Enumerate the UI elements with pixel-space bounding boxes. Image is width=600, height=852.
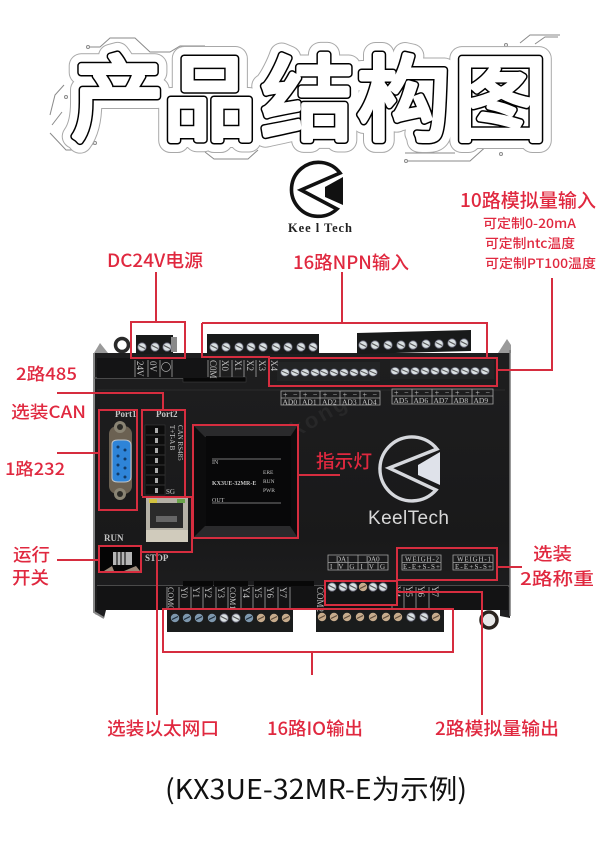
labels: AD0-AD4 grid: AD2 <box>322 397 337 406</box>
title white fill: 图 <box>454 25 547 160</box>
label: 选装2路称重: 选装 <box>533 541 572 566</box>
chamfer corners and mounting tabs <box>94 339 511 353</box>
terminal: analog input right <box>390 360 494 379</box>
indicator panel: IN <box>212 460 219 466</box>
title black outline <box>71 25 547 160</box>
labels: Y outputs: COM1 <box>228 587 237 609</box>
labels: AD5-AD9 grid: AD6 <box>414 396 428 405</box>
labels: AD0-AD4 grid: AD3 <box>342 397 357 406</box>
title black outline: 图 <box>454 25 547 160</box>
run switch: STOP <box>145 553 169 563</box>
title black outline: 结 <box>261 25 354 160</box>
caption: (KX3UE-32MR-E为示例) <box>165 768 467 807</box>
labels: Y outputs: Y4 <box>241 587 251 598</box>
labels: AD5-AD9 grid: + − + − + − + − + − <box>394 388 490 398</box>
port2: RS485 terminal: CAN RS485 <box>176 425 184 461</box>
run switch <box>100 533 169 571</box>
title: 产品结构图 <box>50 25 560 162</box>
title outer halo <box>71 25 547 160</box>
labels: Y outputs: Y4 <box>392 586 402 597</box>
labels: WEIGH-2 grid <box>402 555 441 571</box>
labels: Y outputs: Y7 <box>430 586 440 597</box>
terminal: analog output: COM2 <box>315 587 325 612</box>
port: RJ45 Ethernet <box>146 498 188 542</box>
label: 16路IO输出: 16路IO输出 <box>267 715 363 741</box>
title outer halo: 图 <box>454 25 547 160</box>
title outer halo: 产 <box>71 25 164 160</box>
labels: DA grid <box>328 555 388 571</box>
title white fill: 构 <box>357 25 450 160</box>
terminal: DC power <box>136 335 177 354</box>
title halo inner: 构 <box>357 25 450 160</box>
label: 2路485: 2路485 <box>16 360 77 385</box>
title black outline: 品 <box>163 25 256 160</box>
label: 10路模拟量输入 block: 可定制0-20mA <box>483 213 577 232</box>
labels: Y outputs: Y5 <box>253 587 263 598</box>
indicator panel: ERE <box>263 470 274 476</box>
label: 选装CAN: 选装CAN <box>11 398 86 423</box>
labels: power and X inputs <box>135 360 279 379</box>
labels: power and X inputs: C0M <box>208 360 218 379</box>
device logo: KeelTech <box>368 437 449 529</box>
title black outline: 构 <box>357 25 450 160</box>
title halo inner: 品 <box>163 25 256 160</box>
label: 16路NPN输入: 16路NPN输入 <box>293 249 409 275</box>
device: PLC body <box>94 338 511 628</box>
label: DC24V电源: DC24V电源 <box>107 247 203 273</box>
label: 指示灯: 指示灯 <box>316 448 372 474</box>
labels: Y outputs: Y0 <box>179 587 189 598</box>
device logo: KeelTech: KeelTech <box>368 508 449 529</box>
title outer halo: 构 <box>357 25 450 160</box>
labels: WEIGH-2 grid: E-E+S-S+ <box>403 563 440 571</box>
title white fill: 品 <box>163 25 256 160</box>
label: 选装以太网口: 选装以太网口 <box>107 715 219 741</box>
indicator panel: PWR <box>263 488 275 494</box>
title white fill <box>71 25 547 160</box>
title halo inner <box>71 25 547 160</box>
labels: AD0-AD4 grid: AD4 <box>362 397 377 406</box>
label: 10路模拟量输入 block <box>460 186 596 272</box>
labels: Y outputs: Y6 <box>265 587 275 598</box>
labels: Y outputs <box>166 586 440 609</box>
labels: Y outputs: Y3 <box>216 587 226 598</box>
labels: power and X inputs: 24V <box>135 361 145 377</box>
labels: WEIGH-1 grid: WEIGH-1 <box>457 556 492 564</box>
label: 运行开关: 运行 <box>13 542 50 567</box>
indicator panel: KX3UE-32MR-E <box>212 481 256 487</box>
labels: AD5-AD9 grid: AD8 <box>454 396 468 405</box>
labels: Y outputs: Y5 <box>404 586 414 597</box>
label: 选装2路称重 <box>520 541 594 591</box>
terminal: analog input left <box>277 362 380 381</box>
label: 运行开关: 开关 <box>12 565 49 590</box>
labels: power and X inputs: X3 <box>257 360 267 371</box>
labels: AD0-AD4 grid: + − + − + − + − + − <box>283 390 377 400</box>
label: 运行开关 <box>12 542 50 590</box>
port2: RS485 terminal <box>145 409 184 496</box>
labels: AD5-AD9 grid: AD9 <box>474 396 488 405</box>
terminal: bottom output right <box>316 610 444 632</box>
terminal: bottom output left <box>167 610 293 632</box>
label: 10路模拟量输入 block: 可定制PT100温度 <box>485 253 596 272</box>
brand logo: Keel Tech <box>288 162 352 235</box>
labels: DA grid: DA1 <box>336 556 350 564</box>
title halo inner: 产 <box>71 25 164 160</box>
terminal: top row left <box>207 334 319 354</box>
labels: WEIGH-2 grid: WEIGH-2 <box>405 556 440 564</box>
label: 10路模拟量输入 block: 可定制ntc温度 <box>485 233 575 252</box>
indicator panel <box>193 425 298 538</box>
labels: Y outputs: Y1 <box>191 587 201 598</box>
label: 1路232: 1路232 <box>5 455 65 480</box>
indicator panel: RUN <box>263 479 275 485</box>
labels: WEIGH-1 grid: E-E+S-S+ <box>455 563 492 571</box>
labels: power and X inputs: X0 <box>220 360 230 371</box>
labels: AD0-AD4 grid: AD1 <box>302 397 317 406</box>
circuit traces around title <box>50 35 560 162</box>
title halo inner: 图 <box>454 25 547 160</box>
title halo inner: 结 <box>261 25 354 160</box>
labels: power and X inputs: X4 <box>269 360 279 371</box>
mounting tab bottom right <box>481 612 497 628</box>
run switch: RUN <box>104 533 124 543</box>
watermark: gongkong <box>230 390 351 474</box>
title white fill: 结 <box>261 25 354 160</box>
red annotation lines and boxes <box>57 272 552 715</box>
terminal: analog output <box>315 581 396 612</box>
terminal: top row right <box>357 330 471 354</box>
labels: WEIGH-1 grid <box>453 555 493 571</box>
labels: power and X inputs: 0V <box>148 361 158 372</box>
brand logo: Keel Tech: Kee l Tech <box>288 221 352 235</box>
labels: AD5-AD9 grid <box>392 388 493 405</box>
title outer halo: 品 <box>163 25 256 160</box>
labels: power and X inputs: X1 <box>233 360 243 371</box>
labels: AD0-AD4 grid <box>281 390 380 406</box>
title black outline: 产 <box>71 25 164 160</box>
labels: Y outputs: COM0 <box>166 587 175 609</box>
indicator panel: OUT <box>212 498 225 504</box>
labels: AD0-AD4 grid: AD0 <box>282 397 297 406</box>
label: 2路模拟量输出: 2路模拟量输出 <box>435 715 559 741</box>
port1: DB9 serial connector: Port1 <box>115 409 137 419</box>
title outer halo: 结 <box>261 25 354 160</box>
label: 10路模拟量输入 block: 10路模拟量输入 <box>460 186 596 213</box>
labels: AD5-AD9 grid: AD5 <box>394 396 408 405</box>
label: 选装2路称重: 2路称重 <box>520 566 594 591</box>
title white fill: 产 <box>71 25 164 160</box>
labels: DA grid: DA0 <box>366 556 380 564</box>
port2: RS485 terminal: SG <box>166 488 175 496</box>
labels: DA grid: I V G I V G <box>330 563 385 571</box>
port2: RS485 terminal: T+T-A B <box>168 425 176 451</box>
labels: Y outputs: Y6 <box>416 586 426 597</box>
main case <box>94 353 510 618</box>
labels: Y outputs: Y7 <box>278 587 288 598</box>
port1: DB9 serial connector <box>109 409 137 500</box>
labels: AD5-AD9 grid: AD7 <box>434 396 448 405</box>
labels: Y outputs: Y2 <box>203 587 213 598</box>
port2: RS485 terminal: Port2 <box>156 409 178 419</box>
labels: power and X inputs: X2 <box>245 360 255 371</box>
